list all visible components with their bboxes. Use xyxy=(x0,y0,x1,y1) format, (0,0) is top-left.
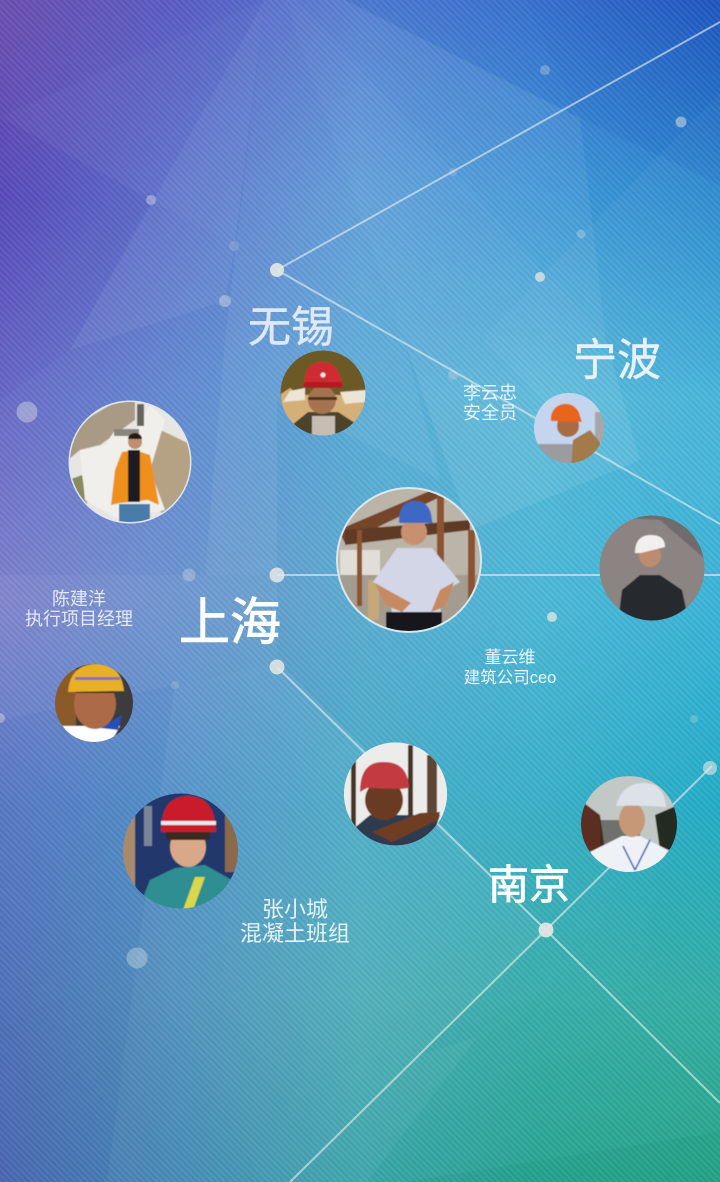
caption: 董云维 建筑公司ceo: 董云维 xyxy=(484,648,536,667)
city: 南京: 南京 xyxy=(488,862,570,908)
caption: 张小城 混凝土班组: 张小城 xyxy=(262,897,328,922)
portrait: man in orange jacket xyxy=(68,398,192,526)
caption: 李云忠 安全员: 李云忠 xyxy=(463,383,517,403)
portrait: man in yellow helmet xyxy=(54,664,134,744)
caption: 陈建洋 执行项目经理: 执行项目经理 xyxy=(25,609,133,629)
portrait: man in white helmet, black jacket xyxy=(598,514,706,622)
caption: 陈建洋 执行项目经理 xyxy=(25,589,133,629)
caption: 李云忠 安全员: 安全员 xyxy=(463,403,517,423)
portrait: CEO in blue helmet xyxy=(336,487,482,636)
city: 无锡: 无锡 xyxy=(248,304,334,352)
caption: 李云忠 安全员 xyxy=(463,383,517,423)
portrait: man in white helmet, white shirt xyxy=(580,776,678,874)
city: 上海: 上海 xyxy=(179,594,281,651)
caption: 张小城 混凝土班组 xyxy=(240,897,350,946)
caption: 陈建洋 执行项目经理: 陈建洋 xyxy=(52,589,106,609)
city: 宁波: 宁波 xyxy=(573,336,661,385)
caption: 董云维 建筑公司ceo xyxy=(464,648,556,687)
portrait: man in red helmet, rocks xyxy=(280,350,366,438)
caption: 张小城 混凝土班组: 混凝土班组 xyxy=(240,921,350,946)
portrait: woman in red helmet, green uniform xyxy=(122,792,240,910)
portrait: man in orange helmet xyxy=(534,393,604,463)
caption: 董云维 建筑公司ceo: 建筑公司ceo xyxy=(464,668,556,687)
network lines xyxy=(277,22,720,1182)
network nodes xyxy=(0,65,717,968)
portrait: man in red helmet with rebar xyxy=(344,742,448,846)
